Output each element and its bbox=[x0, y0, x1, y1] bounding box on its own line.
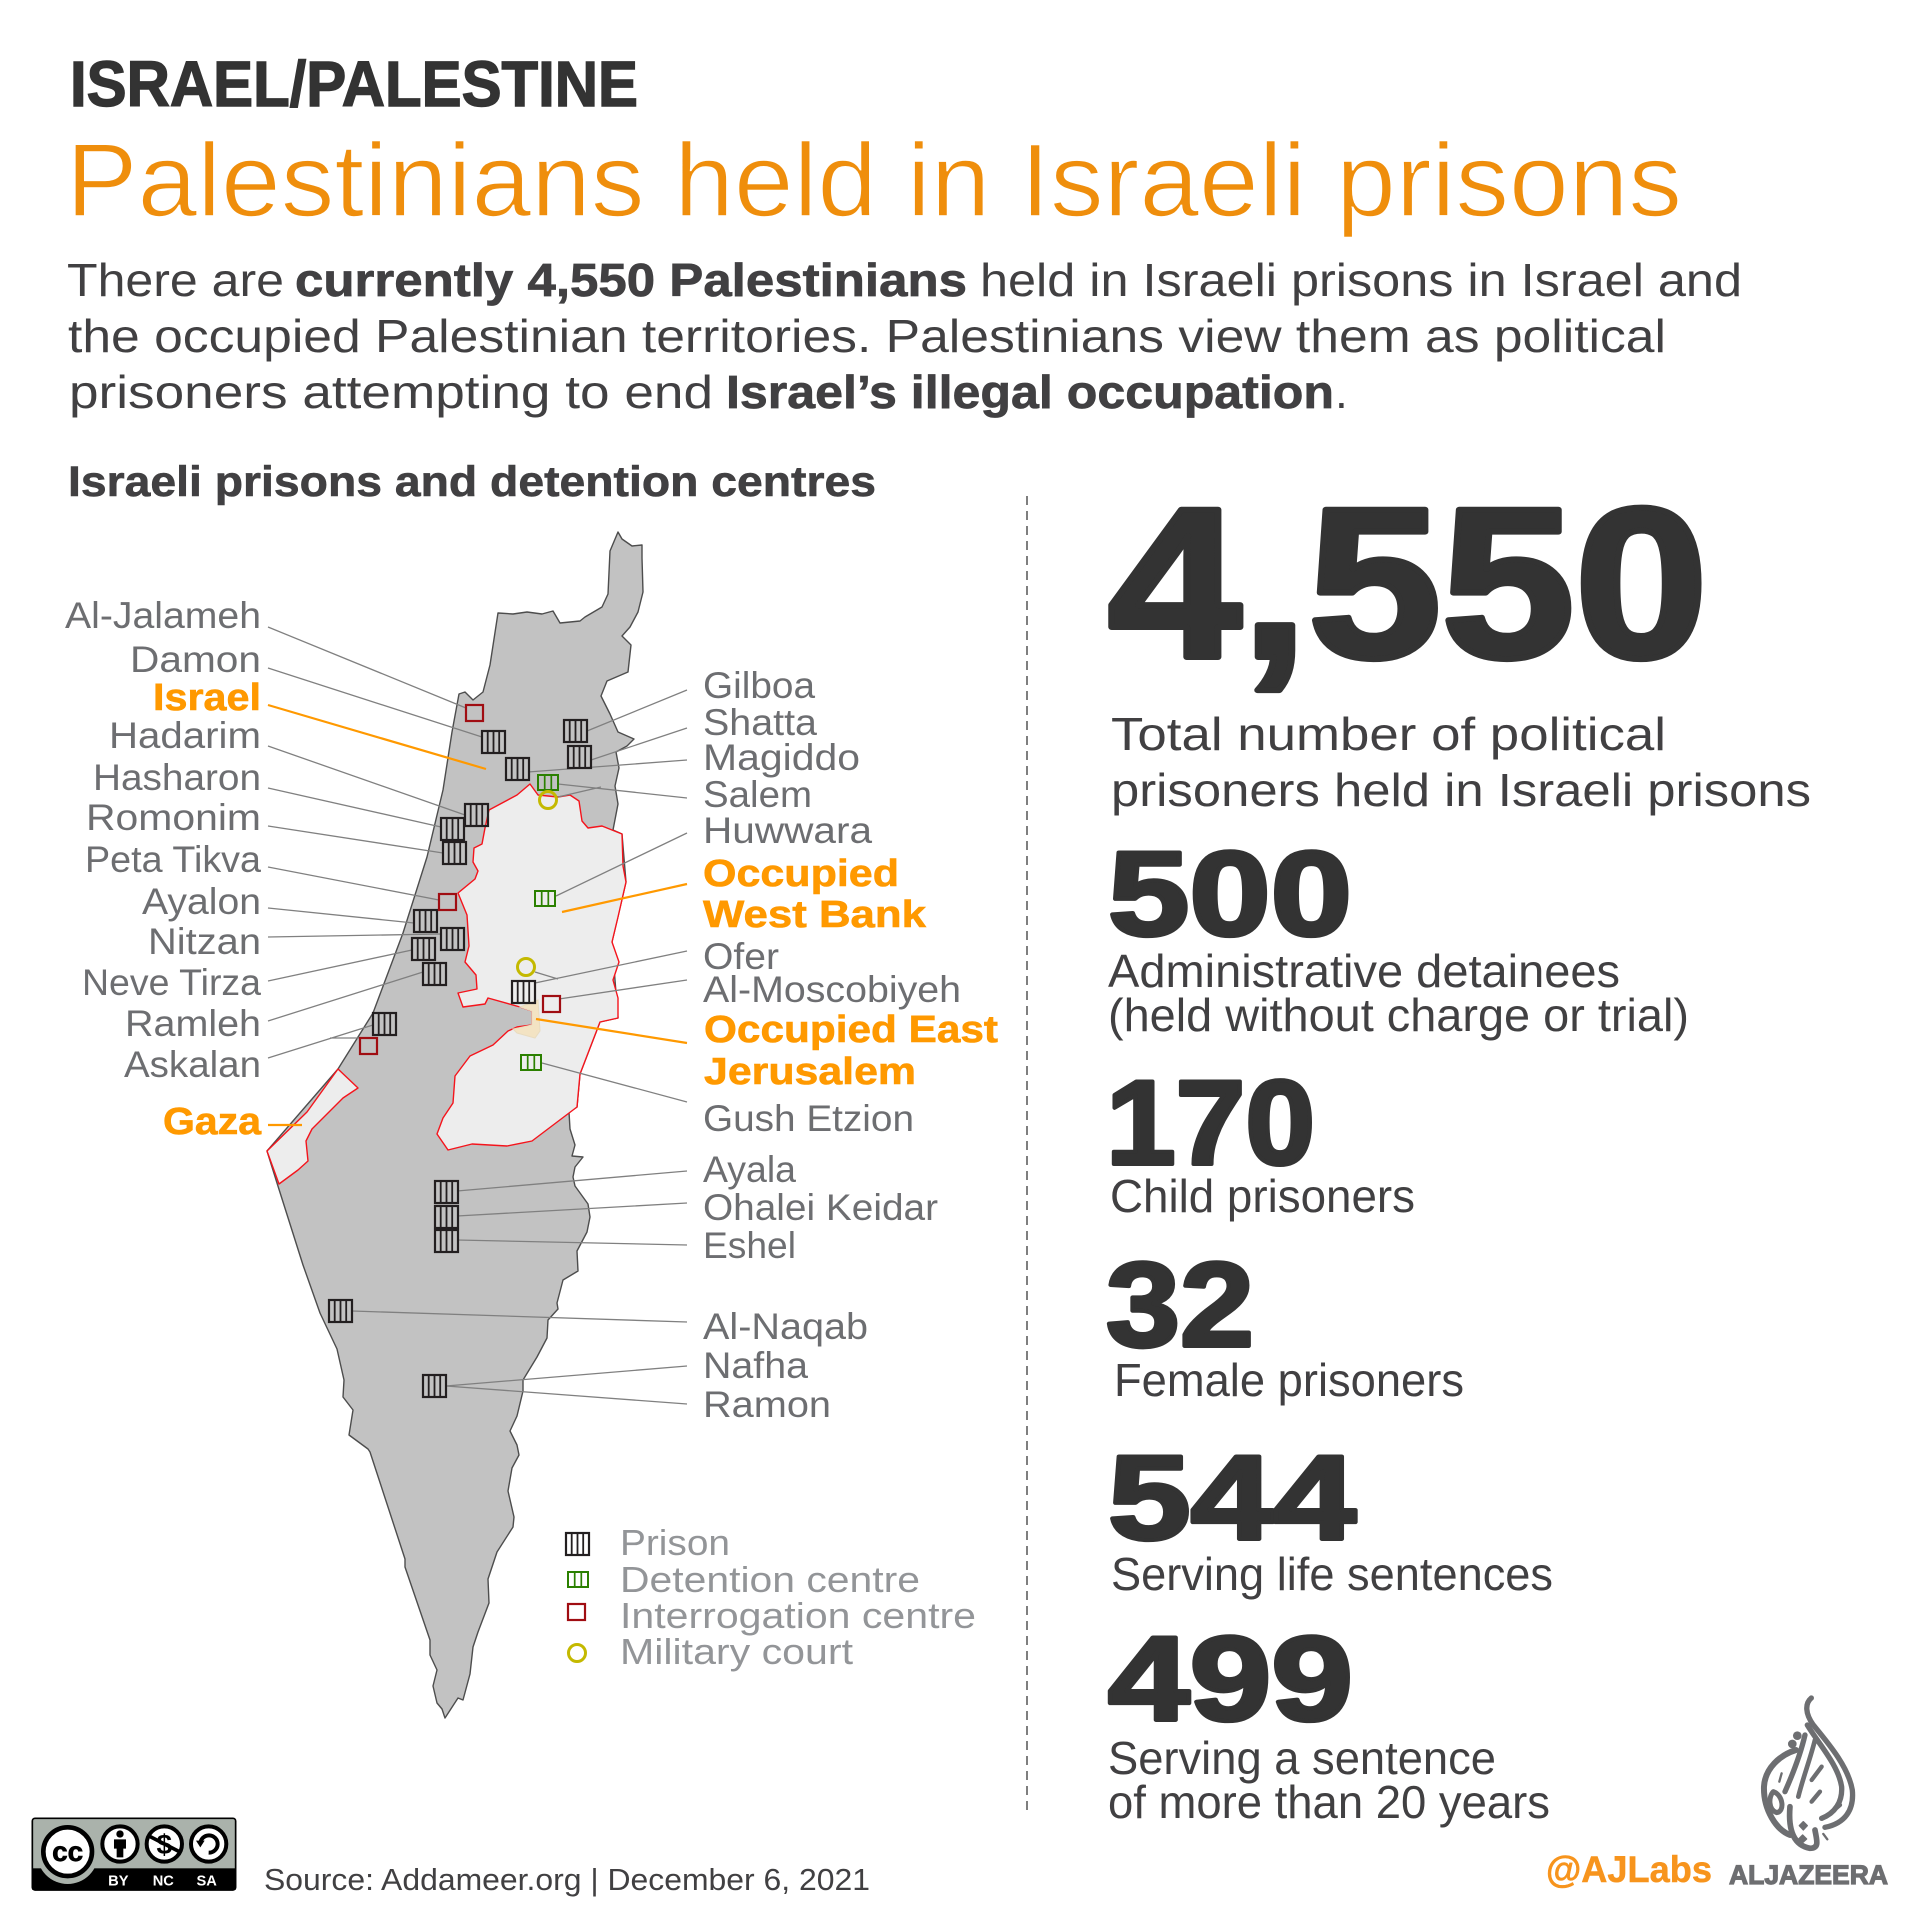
map area: Gaza bbox=[267, 1069, 358, 1184]
icon: creative commons badge: BY bbox=[108, 1873, 129, 1889]
right map labels: Salem bbox=[703, 774, 812, 815]
stat: 4,550 total: 4,550 bbox=[1108, 464, 1708, 703]
stat: 544 life sentences: Serving life sentences bbox=[1111, 1548, 1553, 1600]
right map labels: Huwwara bbox=[703, 810, 872, 851]
stat: 499 long sentences bbox=[1108, 1612, 1550, 1828]
right map labels: Eshel bbox=[703, 1225, 796, 1266]
left map labels: Hadarim bbox=[109, 715, 261, 756]
left map labels: Gaza bbox=[163, 1101, 262, 1143]
stat: 544 life sentences bbox=[1108, 1431, 1553, 1600]
right map labels: Ramon bbox=[703, 1384, 831, 1425]
left map labels: Peta Tikva bbox=[85, 839, 261, 880]
stat: 499 long sentences: 499 bbox=[1108, 1612, 1353, 1746]
icon: creative commons badge bbox=[32, 1818, 236, 1890]
legend: Interrogation centre bbox=[620, 1595, 976, 1636]
logo wordmark: ALJAZEERA: ALJAZEERA bbox=[1729, 1860, 1888, 1890]
stat: 544 life sentences: 544 bbox=[1108, 1431, 1356, 1565]
stat: 170 child prisoners: Child prisoners bbox=[1110, 1170, 1415, 1222]
intro text block: prisoners attempting to end bbox=[69, 366, 713, 418]
right map labels bbox=[703, 665, 998, 1425]
left map labels: Hasharon bbox=[93, 757, 261, 798]
stat: 4,550 total: prisoners held in Israeli prisons bbox=[1111, 764, 1811, 816]
legend: Military court bbox=[620, 1631, 853, 1672]
right map labels: Ayala bbox=[703, 1149, 796, 1190]
icon: creative commons badge: NC bbox=[153, 1873, 174, 1889]
divider bbox=[1026, 496, 1028, 1816]
left map labels: Al-Jalameh bbox=[65, 595, 261, 636]
map of Israel and Palestine bbox=[267, 532, 643, 1718]
stat: 170 child prisoners: 170 bbox=[1106, 1056, 1315, 1190]
map land: Israel bbox=[267, 532, 643, 1718]
title: headline: Palestinians held in Israeli prisons bbox=[66, 123, 1682, 239]
legend bbox=[566, 1522, 976, 1672]
right map labels: Jerusalem bbox=[704, 1051, 916, 1093]
intro text block: . bbox=[1335, 366, 1348, 418]
heading: map section: Israeli prisons and detention centres bbox=[68, 458, 876, 506]
source: Source: Addameer.org | December 6, 2021 bbox=[264, 1862, 870, 1897]
left map labels: Ramleh bbox=[125, 1003, 261, 1044]
left map labels: Damon bbox=[130, 639, 261, 680]
legend: Detention centre bbox=[620, 1559, 920, 1600]
stat: 499 long sentences: Serving a sentence bbox=[1108, 1732, 1496, 1784]
stat: 32 female prisoners bbox=[1106, 1238, 1464, 1406]
right map labels: Nafha bbox=[703, 1345, 808, 1386]
interrogation centre icons bbox=[360, 705, 560, 1054]
right map labels: Ofer bbox=[703, 936, 779, 977]
right map labels: Ohalei Keidar bbox=[703, 1187, 938, 1228]
intro text block: Israel’s illegal occupation bbox=[726, 366, 1334, 418]
right map labels: Gush Etzion bbox=[703, 1098, 914, 1139]
left map labels bbox=[65, 595, 262, 1143]
icon: creative commons badge: SA bbox=[196, 1873, 217, 1889]
left map labels: Ayalon bbox=[142, 881, 261, 922]
stat: 499 long sentences: of more than 20 years bbox=[1108, 1776, 1550, 1828]
intro text block bbox=[67, 254, 1742, 418]
detention centre icons bbox=[521, 775, 558, 1070]
right map labels: Gilboa bbox=[703, 665, 815, 706]
handle: AJLabs: @AJLabs bbox=[1546, 1849, 1712, 1890]
right map labels: Al-Naqab bbox=[703, 1306, 868, 1347]
right map labels: Occupied bbox=[703, 853, 899, 895]
left map labels: Israel bbox=[153, 677, 261, 719]
right map labels: Al-Moscobiyeh bbox=[703, 969, 961, 1010]
stat: 4,550 total: Total number of political bbox=[1111, 708, 1666, 760]
legend: Prison bbox=[620, 1522, 730, 1563]
intro text block: the occupied Palestinian territories. Palestinians view them as political bbox=[68, 310, 1666, 362]
stat: 32 female prisoners: Female prisoners bbox=[1114, 1354, 1464, 1406]
stat: 500 administrative detainees bbox=[1108, 827, 1689, 1041]
stat: 500 administrative detainees: (held without charge or trial) bbox=[1108, 989, 1689, 1041]
icon: creative commons badge: cc bbox=[52, 1836, 83, 1867]
military court icons bbox=[518, 792, 556, 976]
stat: 4,550 total bbox=[1108, 464, 1811, 816]
map area: occupied West Bank bbox=[437, 784, 626, 1150]
right map labels: Occupied East bbox=[704, 1009, 998, 1051]
right map labels: Shatta bbox=[703, 702, 817, 743]
icon: Al Jazeera logo mark bbox=[1764, 1698, 1853, 1848]
stat: 170 child prisoners bbox=[1106, 1056, 1415, 1222]
intro text block: held in Israeli prisons in Israel and bbox=[980, 254, 1742, 306]
leader lines bbox=[268, 627, 687, 1404]
right map labels: West Bank bbox=[703, 894, 927, 936]
left map labels: Askalan bbox=[124, 1044, 261, 1085]
intro text block: There are bbox=[67, 254, 284, 306]
icon: creative commons badge: $ bbox=[157, 1829, 173, 1860]
stat: 500 administrative detainees: Administrative detainees bbox=[1108, 945, 1620, 997]
prison icons bbox=[329, 720, 591, 1397]
right map labels: Magiddo bbox=[703, 737, 860, 778]
map area: occupied East Jerusalem bbox=[513, 1000, 540, 1038]
stat: 32 female prisoners: 32 bbox=[1106, 1238, 1254, 1372]
left map labels: Neve Tirza bbox=[82, 962, 261, 1003]
title: kicker: ISRAEL/PALESTINE bbox=[70, 48, 638, 120]
left map labels: Romonim bbox=[86, 797, 261, 838]
left map labels: Nitzan bbox=[148, 921, 261, 962]
stat: 500 administrative detainees: 500 bbox=[1108, 827, 1352, 961]
intro text block: currently 4,550 Palestinians bbox=[295, 254, 967, 306]
